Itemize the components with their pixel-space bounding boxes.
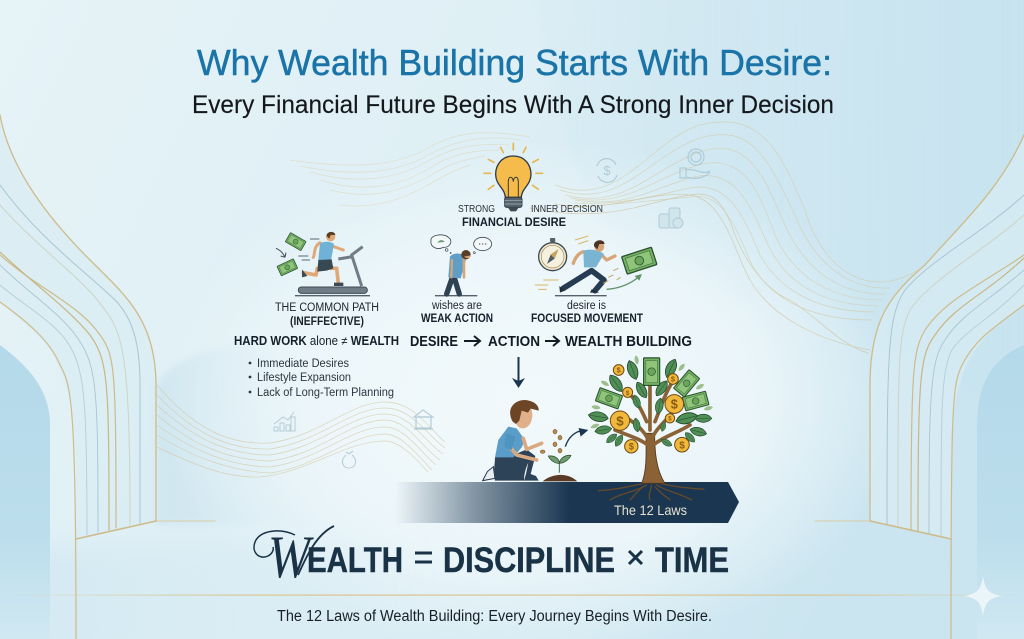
label: inner decision: INNER DECISION [531, 203, 603, 215]
illustration: money tree: $ [617, 366, 621, 375]
faint icon: money bag [342, 451, 356, 468]
list: common path causes: Lack of Long-Term Planning [257, 387, 394, 399]
label: weak action: WEAK ACTION [421, 313, 493, 325]
script W [254, 524, 334, 590]
illustration: money tree: $ [629, 442, 635, 452]
arrow: down to seed [512, 357, 525, 388]
illustration: money tree [588, 355, 713, 500]
equation: wealth equals discipline times time: DISCIPLINE [443, 541, 615, 580]
left arch frame [0, 115, 215, 639]
right arch frame [815, 135, 1024, 639]
illustration: compass and focused runner [535, 236, 657, 296]
illustration: money tree: $ [679, 440, 685, 451]
illustration: money tree: $ [671, 398, 678, 412]
label: focused movement: FOCUSED MOVEMENT [531, 313, 643, 325]
flow: desire to action to wealth building [410, 333, 692, 350]
illustration: treadmill runner [276, 232, 370, 296]
equation: wealth equals discipline times time: EALTH [307, 541, 403, 580]
flow: desire to action to wealth building: DESIRE [410, 333, 458, 350]
decorative waves lower left [157, 385, 445, 477]
faint icon: dollar cycle [597, 159, 617, 182]
label: the common path: THE COMMON PATH [275, 302, 379, 314]
footer tagline: The 12 Laws of Wealth Building: Every Journey Begins With Desire. [277, 608, 712, 625]
decorative waves upper left [290, 133, 530, 206]
icon: light bulb [484, 143, 543, 211]
illustration: money tree: $ [668, 417, 672, 423]
illustration: discouraged man [431, 235, 492, 296]
faint icon: dollar cycle: $ [603, 163, 611, 178]
title: Why Wealth Building Starts With Desire: [197, 42, 832, 83]
illustration: money tree: $ [626, 390, 630, 397]
label: the 12 laws: The 12 Laws [614, 502, 687, 518]
script W: W [268, 524, 314, 590]
list: common path causes [249, 358, 394, 399]
faint icon: hand with coin [680, 149, 710, 178]
faint icon: coin stacks [659, 208, 683, 228]
faint icon: bank [414, 410, 433, 429]
subtitle: Every Financial Future Begins With A Strong Inner Decision [192, 91, 834, 119]
illustration: money tree: $ [671, 375, 675, 384]
faint icon: growth chart [274, 412, 295, 431]
label: hard work alone: HARD WORK alone ≠ WEALTH [234, 334, 399, 348]
equation: wealth equals discipline times time [254, 524, 729, 590]
label: wishes are: wishes are [431, 300, 482, 312]
label: strong: STRONG [458, 203, 495, 215]
label: ineffective: (INEFFECTIVE) [290, 316, 364, 328]
illustration: boy planting seeds [483, 400, 588, 481]
flow: desire to action to wealth building: ACTION [488, 333, 540, 350]
decorative waves upper right [530, 122, 918, 353]
list: common path causes: Immediate Desires [257, 358, 349, 370]
icon: sparkle [964, 576, 1002, 616]
illustration: money tree: $ [616, 413, 624, 428]
label: desire is: desire is [567, 300, 606, 312]
label: financial desire: FINANCIAL DESIRE [462, 215, 566, 229]
list: common path causes: Lifestyle Expansion [257, 372, 351, 384]
equation: wealth equals discipline times time: TIME [655, 541, 729, 580]
ground ribbon [395, 482, 739, 523]
flow: desire to action to wealth building: WEALTH BUILDING [565, 333, 692, 350]
divider [0, 594, 1024, 596]
